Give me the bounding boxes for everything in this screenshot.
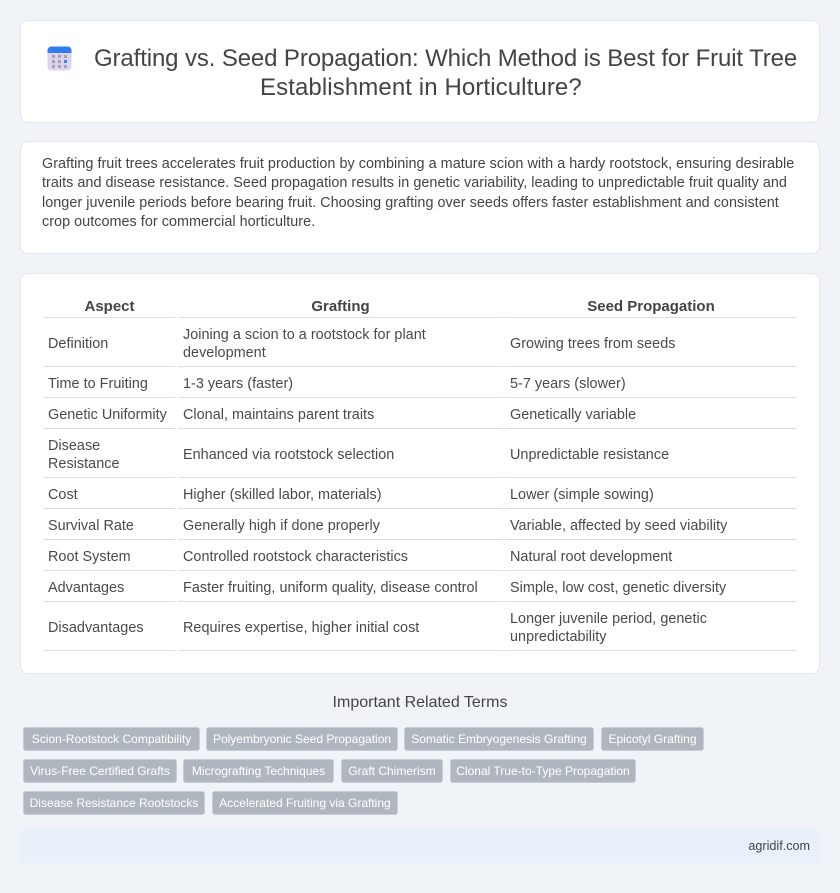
row: Disadvantages: Disadvantages xyxy=(48,620,144,636)
icon: calendar xyxy=(48,46,72,70)
tag xyxy=(404,727,594,751)
row: Disease Resistance: Resistance xyxy=(48,456,120,472)
intro text: Grafting fruit trees accelerates fruit production by combining a mature scion with a hardy rootstock, ensuring desirable xyxy=(42,156,794,172)
row: Cost: Cost xyxy=(48,487,78,503)
comparison table content: Clonal, maintains parent traits xyxy=(183,407,374,423)
comparison table content: Natural root development xyxy=(510,549,672,565)
comparison table content: Genetically variable xyxy=(510,407,636,423)
comparison table content: Controlled rootstock characteristics xyxy=(183,549,408,565)
header: Grafting: Grafting xyxy=(311,298,370,315)
intro text: crop outcomes for commercial horticulture. xyxy=(42,214,315,230)
comparison table content: Generally high if done properly xyxy=(183,518,380,534)
row lines xyxy=(43,317,797,651)
tag xyxy=(23,791,205,815)
comparison table content: Longer juvenile period, genetic xyxy=(510,611,707,627)
tag: Clonal True-to-Type Propagation xyxy=(456,764,630,778)
comparison table content: Enhanced via rootstock selection xyxy=(183,447,394,463)
title xyxy=(94,45,797,101)
tag xyxy=(341,759,443,783)
comparison table content: Higher (skilled labor, materials) xyxy=(183,487,382,503)
tag: Epicotyl Grafting xyxy=(608,732,697,746)
row: Time to Fruiting: Time to Fruiting xyxy=(48,376,148,392)
tag: Micrografting Techniques xyxy=(192,764,325,778)
tag xyxy=(601,727,704,751)
row: Advantages: Advantages xyxy=(48,580,124,596)
comparison table content: Simple, low cost, genetic diversity xyxy=(510,580,726,596)
tag: Accelerated Fruiting via Grafting xyxy=(219,796,391,810)
comparison table content: 5-7 years (slower) xyxy=(510,376,626,392)
comparison table content: development xyxy=(183,345,266,361)
title: Establishment in Horticulture? xyxy=(260,74,582,101)
tag: Somatic Embryogenesis Grafting xyxy=(411,732,587,746)
row: Disease Resistance: Disease xyxy=(48,438,100,454)
comparison table content: Unpredictable resistance xyxy=(510,447,669,463)
intro text: traits and disease resistance. Seed propagation results in genetic variability, leading to unpredictable fruit quality and xyxy=(42,175,787,191)
comparison table content: Requires expertise, higher initial cost xyxy=(183,620,419,636)
row: Root System: Root System xyxy=(48,549,131,565)
comparison table content xyxy=(43,298,797,651)
comparison table content: unpredictability xyxy=(510,629,606,645)
panel: introduction xyxy=(20,141,820,254)
tag xyxy=(183,759,334,783)
tag xyxy=(23,727,200,751)
tag xyxy=(212,791,398,815)
comparison table content: Faster fruiting, uniform quality, disease control xyxy=(183,580,478,596)
row: Definition: Definition xyxy=(48,336,108,352)
tag: Virus-Free Certified Grafts xyxy=(30,764,170,778)
header: Seed Propagation: Seed Propagation xyxy=(587,298,715,315)
comparison table content: Variable, affected by seed viability xyxy=(510,518,727,534)
comparison table content: 1-3 years (faster) xyxy=(183,376,293,392)
tag xyxy=(450,759,636,783)
title: Grafting vs. Seed Propagation: Which Method is Best for Fruit Tree xyxy=(94,45,797,72)
tag xyxy=(23,759,177,783)
tag xyxy=(206,727,398,751)
panel: title card xyxy=(20,20,820,123)
comparison table content: Joining a scion to a rootstock for plant xyxy=(183,327,426,343)
footer xyxy=(20,829,820,863)
row: Genetic Uniformity: Genetic Uniformity xyxy=(48,407,167,423)
heading: related terms: Important Related Terms xyxy=(333,694,507,711)
tag: Scion-Rootstock Compatibility xyxy=(32,732,191,746)
intro text xyxy=(42,156,794,230)
header: Aspect: Aspect xyxy=(84,298,135,315)
footer: site name: agridif.com xyxy=(748,839,810,853)
tags: related terms xyxy=(23,727,704,815)
row: Survival Rate: Survival Rate xyxy=(48,518,134,534)
row: Disease Resistance xyxy=(48,438,120,472)
intro text: longer juvenile periods before bearing fruit. Choosing grafting over seeds offers faster establishment and consistent xyxy=(42,195,779,211)
comparison table content: Growing trees from seeds xyxy=(510,336,675,352)
tag: Polyembryonic Seed Propagation xyxy=(213,732,391,746)
tag: Disease Resistance Rootstocks xyxy=(30,796,198,810)
tag: Graft Chimerism xyxy=(348,764,436,778)
panel: comparison table xyxy=(20,273,820,674)
comparison table content: Lower (simple sowing) xyxy=(510,487,654,503)
